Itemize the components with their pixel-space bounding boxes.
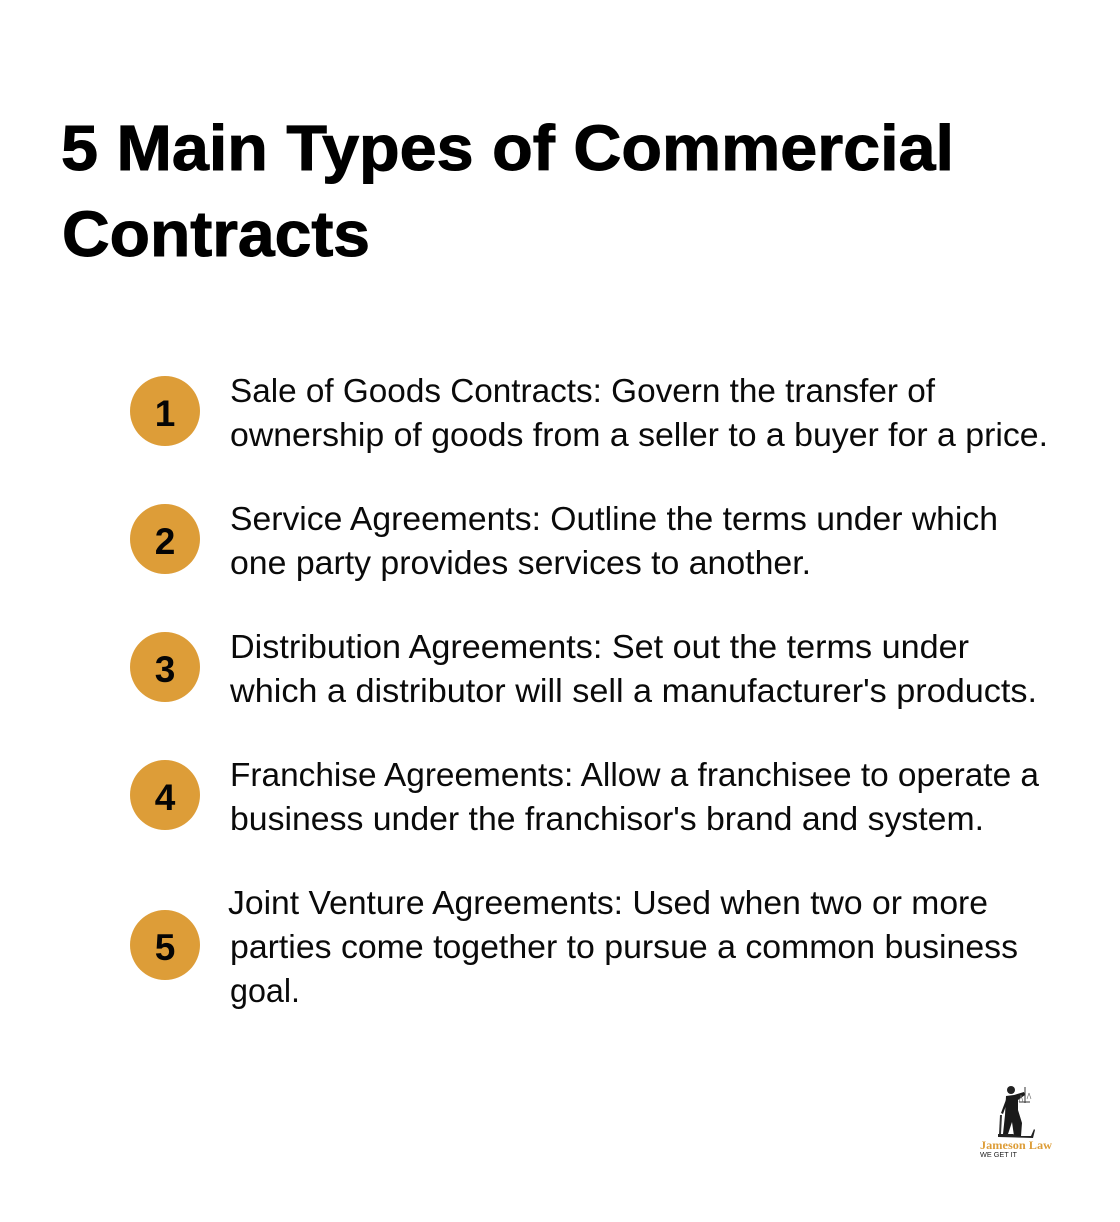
item 2 text: Service Agreements: Outline the terms under which bbox=[230, 500, 998, 537]
list item 5: joint venture agreements bbox=[130, 884, 1018, 1009]
item 1 text: ownership of goods from a seller to a buyer for a price. bbox=[230, 416, 1048, 453]
number badge 2: 2 bbox=[155, 521, 175, 562]
list item 3: distribution agreements bbox=[130, 628, 1037, 709]
list item 1: sale of goods bbox=[130, 372, 1048, 453]
item 5 text: Joint Venture Agreements: Used when two or more bbox=[228, 884, 988, 921]
number badge 3: 3 bbox=[155, 649, 175, 690]
item 2 text: one party provides services to another. bbox=[230, 544, 811, 581]
number badge 5: 5 bbox=[155, 927, 175, 968]
item 3 text: which a distributor will sell a manufacturer's products. bbox=[229, 672, 1037, 709]
item 4 text bbox=[230, 756, 1040, 837]
logo wordmark: Jameson Law bbox=[980, 1140, 1053, 1152]
title bbox=[61, 112, 954, 270]
item 5 text: parties come together to pursue a common business bbox=[230, 928, 1018, 965]
number badge 4 bbox=[130, 760, 200, 830]
item 3 text bbox=[229, 628, 1037, 709]
number badge 3 bbox=[130, 632, 200, 702]
item 2 text bbox=[230, 500, 998, 581]
number badge 1 bbox=[130, 376, 200, 446]
list item 4: franchise agreements bbox=[130, 756, 1040, 837]
item 4 text: Franchise Agreements: Allow a franchisee to operate a bbox=[230, 756, 1040, 793]
item 1 text: Sale of Goods Contracts: Govern the transfer of bbox=[230, 372, 936, 409]
item 4 text: business under the franchisor's brand and system. bbox=[230, 800, 984, 837]
logo: Jameson Law bbox=[980, 1086, 1053, 1159]
icon: lady justice with scales bbox=[998, 1086, 1035, 1138]
list item 2: service agreements bbox=[130, 500, 998, 581]
number badge 5 bbox=[130, 910, 200, 980]
number badge 2 bbox=[130, 504, 200, 574]
number badge 1: 1 bbox=[155, 393, 175, 434]
item 1 text bbox=[230, 372, 1048, 453]
item 5 text bbox=[228, 884, 1018, 1009]
item 3 text: Distribution Agreements: Set out the terms under bbox=[230, 628, 969, 665]
title: 5 Main Types of Commercial bbox=[61, 112, 954, 184]
logo tagline: WE GET IT bbox=[980, 1150, 1017, 1159]
item 5 text: goal. bbox=[230, 972, 300, 1009]
number badge 4: 4 bbox=[155, 777, 176, 818]
title: Contracts bbox=[62, 198, 370, 270]
